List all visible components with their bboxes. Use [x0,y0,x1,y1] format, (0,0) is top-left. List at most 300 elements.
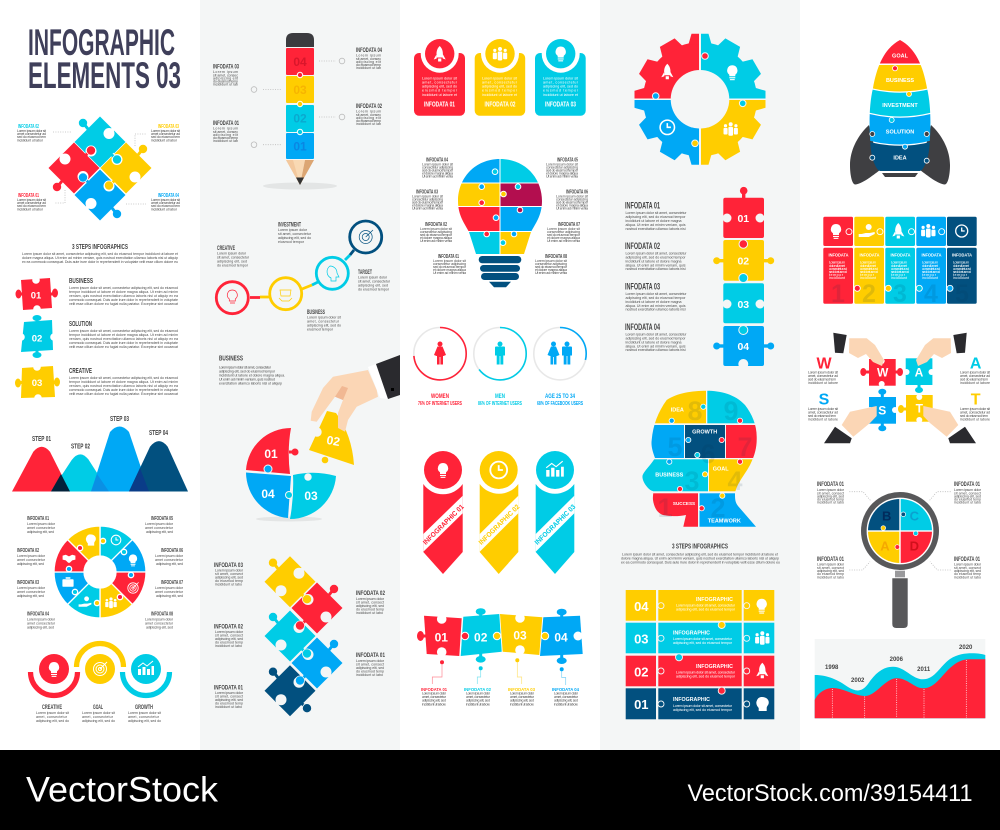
ring labels right: adipiscing elit, sed [156,562,183,566]
pencil labels: INFODATA 04 [356,47,382,54]
text block: infodata 04: incididunt ut labore et dolore magna [626,340,682,344]
text block: diamond infodata 02: sed do eiusmod tem [17,135,46,139]
chain labels: adipiscing elit, sed [217,260,247,264]
five column puzzle: tempor [891,273,906,277]
bulb labels left: sed do eiusmod tempor [422,168,454,172]
strip labels: Lorem ipsum dolor [554,692,579,696]
card: infodata 02: adipiscing elit, sed do [482,84,517,88]
text block: diamond infodata 02: amet consectetur ad [17,132,46,136]
text block: diamond infodata 03: Lorem ipsum dolor sit [151,129,180,133]
ring labels left: INFODATA 04 [27,612,50,618]
magnifier labels: incididunt ut labo [817,576,844,580]
stacked puzzle labels: adipiscing elit, sed [215,637,243,641]
five column puzzle: INFODATA [828,252,848,257]
mountain step chart: STEP 02 [71,444,90,450]
five column puzzle: INFODATA [860,252,880,257]
text block: diamond infodata 04: Lorem ipsum dolor sit [151,198,180,202]
text block: solution: veniam, quis nostrud exercitation ullamco laboris nisi ut aliquip ex ea [69,337,178,341]
five column puzzle: tempor [829,273,844,277]
bulb labels left: Lorem ipsum dolor sit [422,162,453,166]
text block: diamond infodata 01: sed do eiusmod tem [17,204,46,208]
puzzle grid rows: INFOGRAPHIC [673,630,710,636]
pencil labels: Lorem ipsum [356,110,381,114]
pencil labels [213,47,382,143]
wave labels: Lorem ipsum dolor sit [82,711,115,715]
horizontal puzzle strip [417,608,583,685]
progress ring: age 25 to 34: 68% OF FACEBOOK USERS [537,401,583,407]
chain labels: Lorem ipsum dolor [358,276,388,280]
ring labels right: amet consectetur [145,622,174,626]
bulb labels right: consectetur adipiscing [535,262,567,266]
puzzle grid rows: 02 [634,664,649,680]
bulb labels right: Ut enim ad minim venia [546,174,578,178]
strip labels: incididunt ut labore [422,702,446,706]
bulb labels left: Ut enim ad minim venia [433,271,466,275]
text block: business with hand: adipiscing elit, sed do eiusmod tempor [219,370,276,374]
five column puzzle: incididunt [891,276,907,280]
text block: solution: commodo consequat. Duis aute irure dolor in reprehenderit in voluptate [69,341,178,345]
puzzle grid rows: INFOGRAPHIC [673,697,710,703]
text block: business with hand: Lorem ipsum dolor sit amet, consectetur [219,366,272,370]
ribbon: infographic 02: INFOGRAPHIC 02 [478,504,521,547]
text block: diamond infodata 03: amet consectetur ad [151,132,180,136]
text block: creative: CREATIVE [69,366,92,375]
SWOT labels: W [816,356,832,372]
card: infodata 02: INFODATA 02 [484,100,516,108]
bulb labels right: INFODATA 07 [558,222,580,228]
ring labels left: Lorem ipsum dolor [17,554,46,558]
five column puzzle: consectetur ad [891,267,909,271]
panel: column 5 [808,40,990,718]
SWOT labels [808,356,990,422]
wave labels: GOAL [93,704,103,711]
wave labels: adipiscing elit, sed do [82,719,115,723]
SWOT labels: sed do eiusmod tem [960,414,988,418]
five column puzzle: tempor [922,273,937,277]
bulb labels right: et dolore magna aliqua [547,236,580,240]
rocket puzzle: SOLUTION [886,130,914,136]
ring labels left: amet consectetur [17,558,46,562]
head puzzle: GOAL [713,466,729,472]
magnifier labels: INFODATA 01 [954,482,980,488]
bulb labels right [535,158,589,275]
text block: infodata 03: nostrud exercitation ullamco laboris nisi [626,308,686,312]
bulb labels left: Ut enim ad minim venia [422,174,453,178]
wave labels: CREATIVE [42,704,62,711]
strip labels: adipiscing elit, sed [466,698,490,702]
stacked puzzle labels: do eiusmod temp [215,579,243,583]
heading: 3 steps infographics [22,242,178,264]
bulb labels right: Lorem ipsum dolor sit [546,162,578,166]
ribbon: infographic 03 [534,451,577,574]
head puzzle: 6 [700,439,716,469]
five column puzzle: sed do eiusmod [829,270,847,274]
puzzle grid rows: Lorem ipsum dolor sit amet, consectetur [673,704,733,708]
five column puzzle: sed do eiusmod [922,270,940,274]
stacked puzzle labels: INFODATA 02 [356,590,385,597]
heading: 3 steps infographics [621,542,780,564]
pencil labels: incididunt ut lab [356,122,381,126]
magnifier labels: sit amet, consect [954,491,981,495]
head puzzle: 5 [667,432,683,462]
wave labels: Lorem ipsum dolor sit [128,711,161,715]
stacked diagonal puzzle [264,556,342,716]
text block: infodata 01 [625,200,687,231]
rocket puzzle: INVESTMENT [882,103,918,109]
SWOT labels: Lorem ipsum dolor sit [808,407,838,411]
horizontal puzzle strip: 04 [554,630,568,644]
puzzle grid rows: adipiscing elit, sed do eiusmod tempor [676,674,736,678]
text block: infodata 01: incididunt ut labore et dolore magna [626,219,682,223]
text block: infodata 02: incididunt ut labore et dolore magna [626,260,682,264]
text block: creative [69,366,178,396]
card: infodata 03 [535,35,586,116]
five column puzzle: sed do eiusmod [860,270,878,274]
puzzle grid rows: Lorem ipsum dolor sit amet, consectetur [676,670,736,674]
title: ELEMENTS 03 [28,55,181,96]
area chart with years [815,639,985,718]
bulb labels left: et dolore magna aliqua [433,268,466,272]
text block: infodata 04: adipiscing elit, sed do eiusmod tempor [626,336,686,340]
strip labels: incididunt ut labore [466,702,490,706]
ring labels right: Lorem ipsum dolor [155,586,184,590]
text block: infodata 03: Lorem ipsum dolor sit amet, consectetur [626,292,687,296]
head puzzle: 4 [727,466,743,496]
stacked puzzle labels: incididunt ut labo [215,582,242,586]
chain labels: CREATIVE [217,246,235,252]
magnifier labels: adipiscing elit, sed [817,569,844,573]
five column puzzle: 2 [862,280,876,308]
bulb labels right: Lorem ipsum dolor sit [556,194,588,198]
text block: business: commodo consequat. Duis aute irure dolor in reprehenderit in voluptate [69,298,178,302]
text block: infodata 01: aliqua. Ut enim ad minim veniam, quis [626,223,686,227]
gear puzzle [634,34,766,165]
card: infodata 01: incididunt ut labore et [422,93,457,97]
SWOT labels: incididunt ut labore [808,418,838,422]
rocket puzzle: IDEA [893,155,907,161]
stacked puzzle labels: Lorem ipsum dolor [215,568,244,572]
heading: 3 steps infographics: dolore magna aliqua. Ut enim ad minim veniam, quis nostrud exercitation ullamco laboris nisi ut aliquip [22,256,178,260]
stacked puzzle labels: adipiscing elit, sed [356,666,384,670]
puzzle grid rows: Lorem ipsum dolor sit amet, consectetur [676,604,736,608]
bulb labels right: et dolore magna aliqua [556,204,588,208]
head puzzle: 8 [687,396,703,426]
pencil labels: INFODATA 03 [213,64,239,70]
pencil chart [251,33,345,190]
bulb labels left: consectetur adipiscing [420,230,452,234]
chain labels: do eiusmod tempor [358,288,390,292]
puzzle grid rows: 01 [634,697,649,712]
head puzzle: 3 [684,466,700,496]
heading: 3 steps infographics: Lorem ipsum dolor sit amet, consectetur adipiscing elit, sed do eiusmod tempor incididunt ut labore et [622,552,778,556]
magnifier labels: adipiscing elit, sed [954,494,981,498]
wave with creative goal growth circles [30,644,170,695]
text block: creative: commodo consequat. Duis aute irure dolor in reprehenderit in voluptate [69,388,178,392]
pencil labels: Lorem ipsum [213,70,238,74]
card: infodata 02: Lorem ipsum dolor sit [482,76,517,80]
title: INFOGRAPHIC [28,22,175,63]
puzzle piece 01 [16,276,58,313]
bulb labels right: sed do eiusmod tempor [546,168,579,172]
SWOT labels: sed do eiusmod tem [808,414,836,418]
puzzle grid rows: adipiscing elit, sed do eiusmod tempor [676,608,736,612]
stacked puzzle labels: incididunt ut labo [215,644,242,648]
bulb labels left: sed do eiusmod tempor [412,200,444,204]
bulb labels right: Lorem ipsum dolor sit [547,227,580,231]
five column puzzle: incididunt [829,276,845,280]
five column puzzle: tempor [860,273,875,277]
ribbon: infographic 02 [478,451,521,574]
pencil labels: sit amet, consec [213,130,238,134]
card: infodata 03: Lorem ipsum dolor sit [543,76,578,80]
five column puzzle: consectetur ad [922,267,940,271]
text block: diamond infodata 01: Lorem ipsum dolor sit [17,198,46,202]
magnifier labels: sit amet, consect [817,566,844,570]
bulb labels left: et dolore magna aliqua [422,172,453,176]
strip labels: Lorem ipsum dolor [422,692,447,696]
text block: infodata 02: adipiscing elit, sed do eiusmod tempor [626,256,686,260]
text block: diamond infodata 02 [17,124,46,142]
five column puzzle: dolor sit amet [829,264,845,268]
stacked puzzle labels: adipiscing elit, sed [356,604,384,608]
text block: diamond infodata 01 [17,193,46,212]
ring labels right: amet consectetur [145,526,174,530]
panel: column 3 [412,39,588,706]
brand logo text: VectorStock [26,770,219,810]
pencil labels: adipiscing elit [356,116,381,120]
ring labels left: adipiscing elit, sed [27,530,54,534]
SWOT hands puzzle: A [915,366,924,380]
progress ring: men: 86% OF INTERNET USERS [478,401,522,407]
wave labels: GROWTH [135,704,153,711]
bulb labels left: et dolore magna aliqua [412,204,443,208]
pencil labels: Lorem ipsum [356,54,381,58]
text block: diamond infodata 02: incididunt ut labor [17,138,44,142]
stacked puzzle labels: sit amet, consect [356,600,384,604]
text block: infodata 01: nostrud exercitation ullamco laboris nisi [626,227,686,231]
puzzle piece 01: 01 [31,290,42,302]
strip labels: adipiscing elit, sed [422,698,446,702]
text block: diamond infodata 03: sed do eiusmod tem [151,135,180,139]
ring labels left: amet consectetur [27,622,56,626]
stacked puzzle labels [214,562,385,709]
bulb labels left: INFODATA 01 [438,254,459,260]
pencil chart: 04 [293,55,307,69]
bulb labels right: et dolore magna aliqua [535,268,567,272]
magnifier labels: adipiscing elit, sed [817,494,844,498]
rocket puzzle [850,30,950,184]
text block: infodata 02: nostrud exercitation ullamco laboris nisi [626,267,686,271]
ring labels left: INFODATA 02 [17,548,39,554]
vertical puzzle: 03 [737,299,749,311]
bulb labels left: INFODATA 02 [425,222,447,228]
head puzzle: SUCCESS [673,501,695,506]
chain labels: amet, consectetur [307,320,340,324]
chain labels: sit amet, consectetur [217,256,250,260]
stacked puzzle labels: adipiscing elit, sed [215,698,243,702]
pencil labels: incididunt ut lab [213,139,238,143]
text block: business with hand: incididunt ut labore et dolore magna aliqua. [219,374,285,378]
mountain step chart: STEP 03 [110,416,129,423]
magnifier puzzle: A [880,538,890,553]
ring labels left: INFODATA 03 [17,580,39,586]
ring labels right [145,516,184,630]
rocket puzzle: GOAL [892,54,909,60]
chain labels: sit amet, consectetur [278,232,312,236]
bulb labels left: INFODATA 03 [416,190,438,196]
SWOT hands puzzle: T [916,402,924,416]
text block: infodata 03 [625,282,687,312]
ring labels right: Lorem ipsum dolor [155,554,184,558]
card: infodata 03: amet, consectetur [543,80,579,84]
magnifier labels: incididunt ut labo [954,576,981,580]
ring labels right: amet consectetur [155,590,184,594]
five column puzzle: sed do eiusmod [953,270,971,274]
wave labels: amet, consectetur [82,715,114,719]
wave labels: Lorem ipsum dolor sit [36,711,69,715]
five column puzzle: 4 [924,280,938,308]
bulb labels right: consectetur adipiscing [546,166,578,170]
rocket puzzle: BUSINESS [886,78,914,84]
SWOT labels: amet, consectetur ad [960,410,990,414]
chain of four circles [216,221,382,314]
pencil chart: 02 [293,112,307,126]
strip labels: INFODATA 03 [508,687,536,692]
pencil labels: do eiusmod temp [213,136,238,140]
magnifier labels: do eiusmod temp [817,572,844,576]
text block: diamond infodata 04: sed do eiusmod tem [151,204,180,208]
SWOT labels: amet, consectetur ad [808,374,838,378]
ring labels right: INFODATA 06 [161,548,183,554]
pencil labels: do eiusmod temp [213,80,238,84]
SWOT labels: incididunt ut labore [808,381,838,385]
text block: diamond infodata 03: incididunt ut labor [151,138,178,142]
card: infodata 02 [475,35,525,116]
text block: diamond infodata 01: INFODATA 01 [18,193,39,199]
magnifier puzzle [849,490,951,628]
SWOT labels: incididunt ut labore [960,381,990,385]
chain labels [217,222,391,332]
ribbon: infographic 01 [422,451,466,574]
text block: infodata 02: INFODATA 02 [625,241,660,251]
vertical puzzle [713,187,774,369]
puzzle grid rows: adipiscing elit, sed do eiusmod tempor [673,708,733,712]
text block: infodata 04: nostrud exercitation ullamco laboris nisi [626,348,686,352]
text block: diamond infodata 04 [151,193,180,212]
chain labels: BUSINESS [307,310,325,316]
SWOT labels: A [970,356,982,372]
five column puzzle: incididunt [953,276,969,280]
text block: diamond infodata 04: INFODATA 04 [158,193,180,199]
horizontal puzzle strip: 01 [435,630,448,644]
stacked puzzle labels: INFODATA 03 [214,562,243,569]
bulb labels right: sed do eiusmod tempor [556,200,589,204]
wave labels: adipiscing elit, sed do [128,719,161,723]
SWOT hands puzzle: S [878,403,886,417]
strip labels: INFODATA 02 [464,687,492,692]
text block: creative: Lorem ipsum dolor sit amet, consectetur adipiscing elit, sed do eiusmod [69,376,178,380]
five column puzzle: Lorem ipsum [891,260,907,264]
text block: infodata 01: INFODATA 01 [625,200,660,210]
stacked puzzle labels: sit amet, consect [356,662,384,666]
progress ring: age 25 to 34 [534,328,586,407]
five column puzzle: incididunt [860,276,876,280]
area chart with years: 1998 [825,665,839,671]
text block: solution: Lorem ipsum dolor sit amet, consectetur adipiscing elit, sed do eiusmod [69,329,178,333]
magnifier puzzle: D [910,538,919,553]
five column puzzle: dolor sit amet [860,264,876,268]
five column puzzle: INFODATA [922,252,942,257]
text block: infodata 01: Lorem ipsum dolor sit amet, consectetur [626,211,687,215]
magnifier labels: Lorem ipsum dolor [954,563,982,567]
area chart with years: 2011 [917,667,931,673]
pencil labels: sit amet, consec [213,73,238,77]
card: infodata 01: amet, consectetur [422,80,458,84]
head puzzle [640,388,762,528]
card: infodata 01: adipiscing elit, sed do [422,84,457,88]
ring labels left: Lorem ipsum dolor [27,522,56,526]
light bulb puzzle [458,159,542,288]
area chart with years: 2002 [851,678,865,684]
heading: 3 steps infographics: ex ea commodo consequat. Duis aute irure dolor in reprehenderit in voluptate velit esse cillum dolore eu [621,560,780,564]
five column puzzle: INFODATA [952,252,972,257]
ring labels right: INFODATA 08 [151,612,173,618]
wave labels [36,704,161,723]
wave labels: amet, consectetur [36,715,68,719]
head puzzle: IDEA [671,407,684,413]
mountain step chart: STEP 04 [149,430,168,437]
stacked puzzle labels: incididunt ut labo [215,705,242,709]
text block: business with hand: Ut enim ad minim veniam, quis nostrud [219,378,275,382]
footer band [0,750,1000,830]
pencil chart: 03 [293,83,307,97]
SWOT labels: sed do eiusmod tem [960,378,988,382]
card: infodata 03: adipiscing elit, sed do [543,84,578,88]
pencil labels: INFODATA 02 [356,103,382,110]
text block: business with hand: exercitation ullamco laboris nisi ut aliquip [219,382,282,386]
card: infodata 03: eiusmod tempor [543,88,579,92]
ribbon: infographic 01: INFOGRAPHIC 01 [422,504,466,547]
stacked puzzle labels: incididunt ut labo [356,673,383,677]
strip labels: incididunt ut labore [554,702,578,706]
bulb labels right: INFODATA 06 [566,190,588,196]
chain labels: INVESTMENT [278,222,301,228]
head puzzle: GROWTH [692,430,717,436]
puzzle piece 03 [15,363,60,402]
chain labels: adipiscing elit, sed [358,284,388,288]
SWOT labels: sed do eiusmod tem [808,378,836,382]
text block: solution: tempor incididunt ut labore et dolore magna aliqua. Ut enim ad minim [69,333,178,337]
SWOT labels: S [819,392,830,408]
text block: business with hand [219,356,285,386]
ring labels left: adipiscing elit, sed [27,626,54,630]
text block: infodata 04: aliqua. Ut enim ad minim veniam, quis [626,344,686,348]
bulb labels left: Ut enim ad minim venia [412,206,443,210]
bulb labels left: Lorem ipsum dolor sit [433,259,466,263]
five column puzzle: consectetur ad [860,267,878,271]
heading: 3 steps infographics: ex ea commodo consequat. Duis aute irure dolor in reprehenderit in voluptate velit esse cillum dolore eu [22,260,178,264]
magnifier labels: INFODATA 01 [817,482,844,488]
text block: infodata 03: aliqua. Ut enim ad minim veniam, quis [626,304,686,308]
stacked puzzle labels: incididunt ut labo [356,611,383,615]
progress ring: women: 76% OF INTERNET USERS [418,401,462,407]
magnifier labels: INFODATA 01 [954,557,980,563]
circular puzzle with hand [246,355,400,522]
progress ring: women [414,328,466,407]
bulb labels right: Ut enim ad minim venia [547,239,580,243]
circular puzzle with hand: 01 [264,447,278,461]
strip labels: Lorem ipsum dolor [466,692,491,696]
